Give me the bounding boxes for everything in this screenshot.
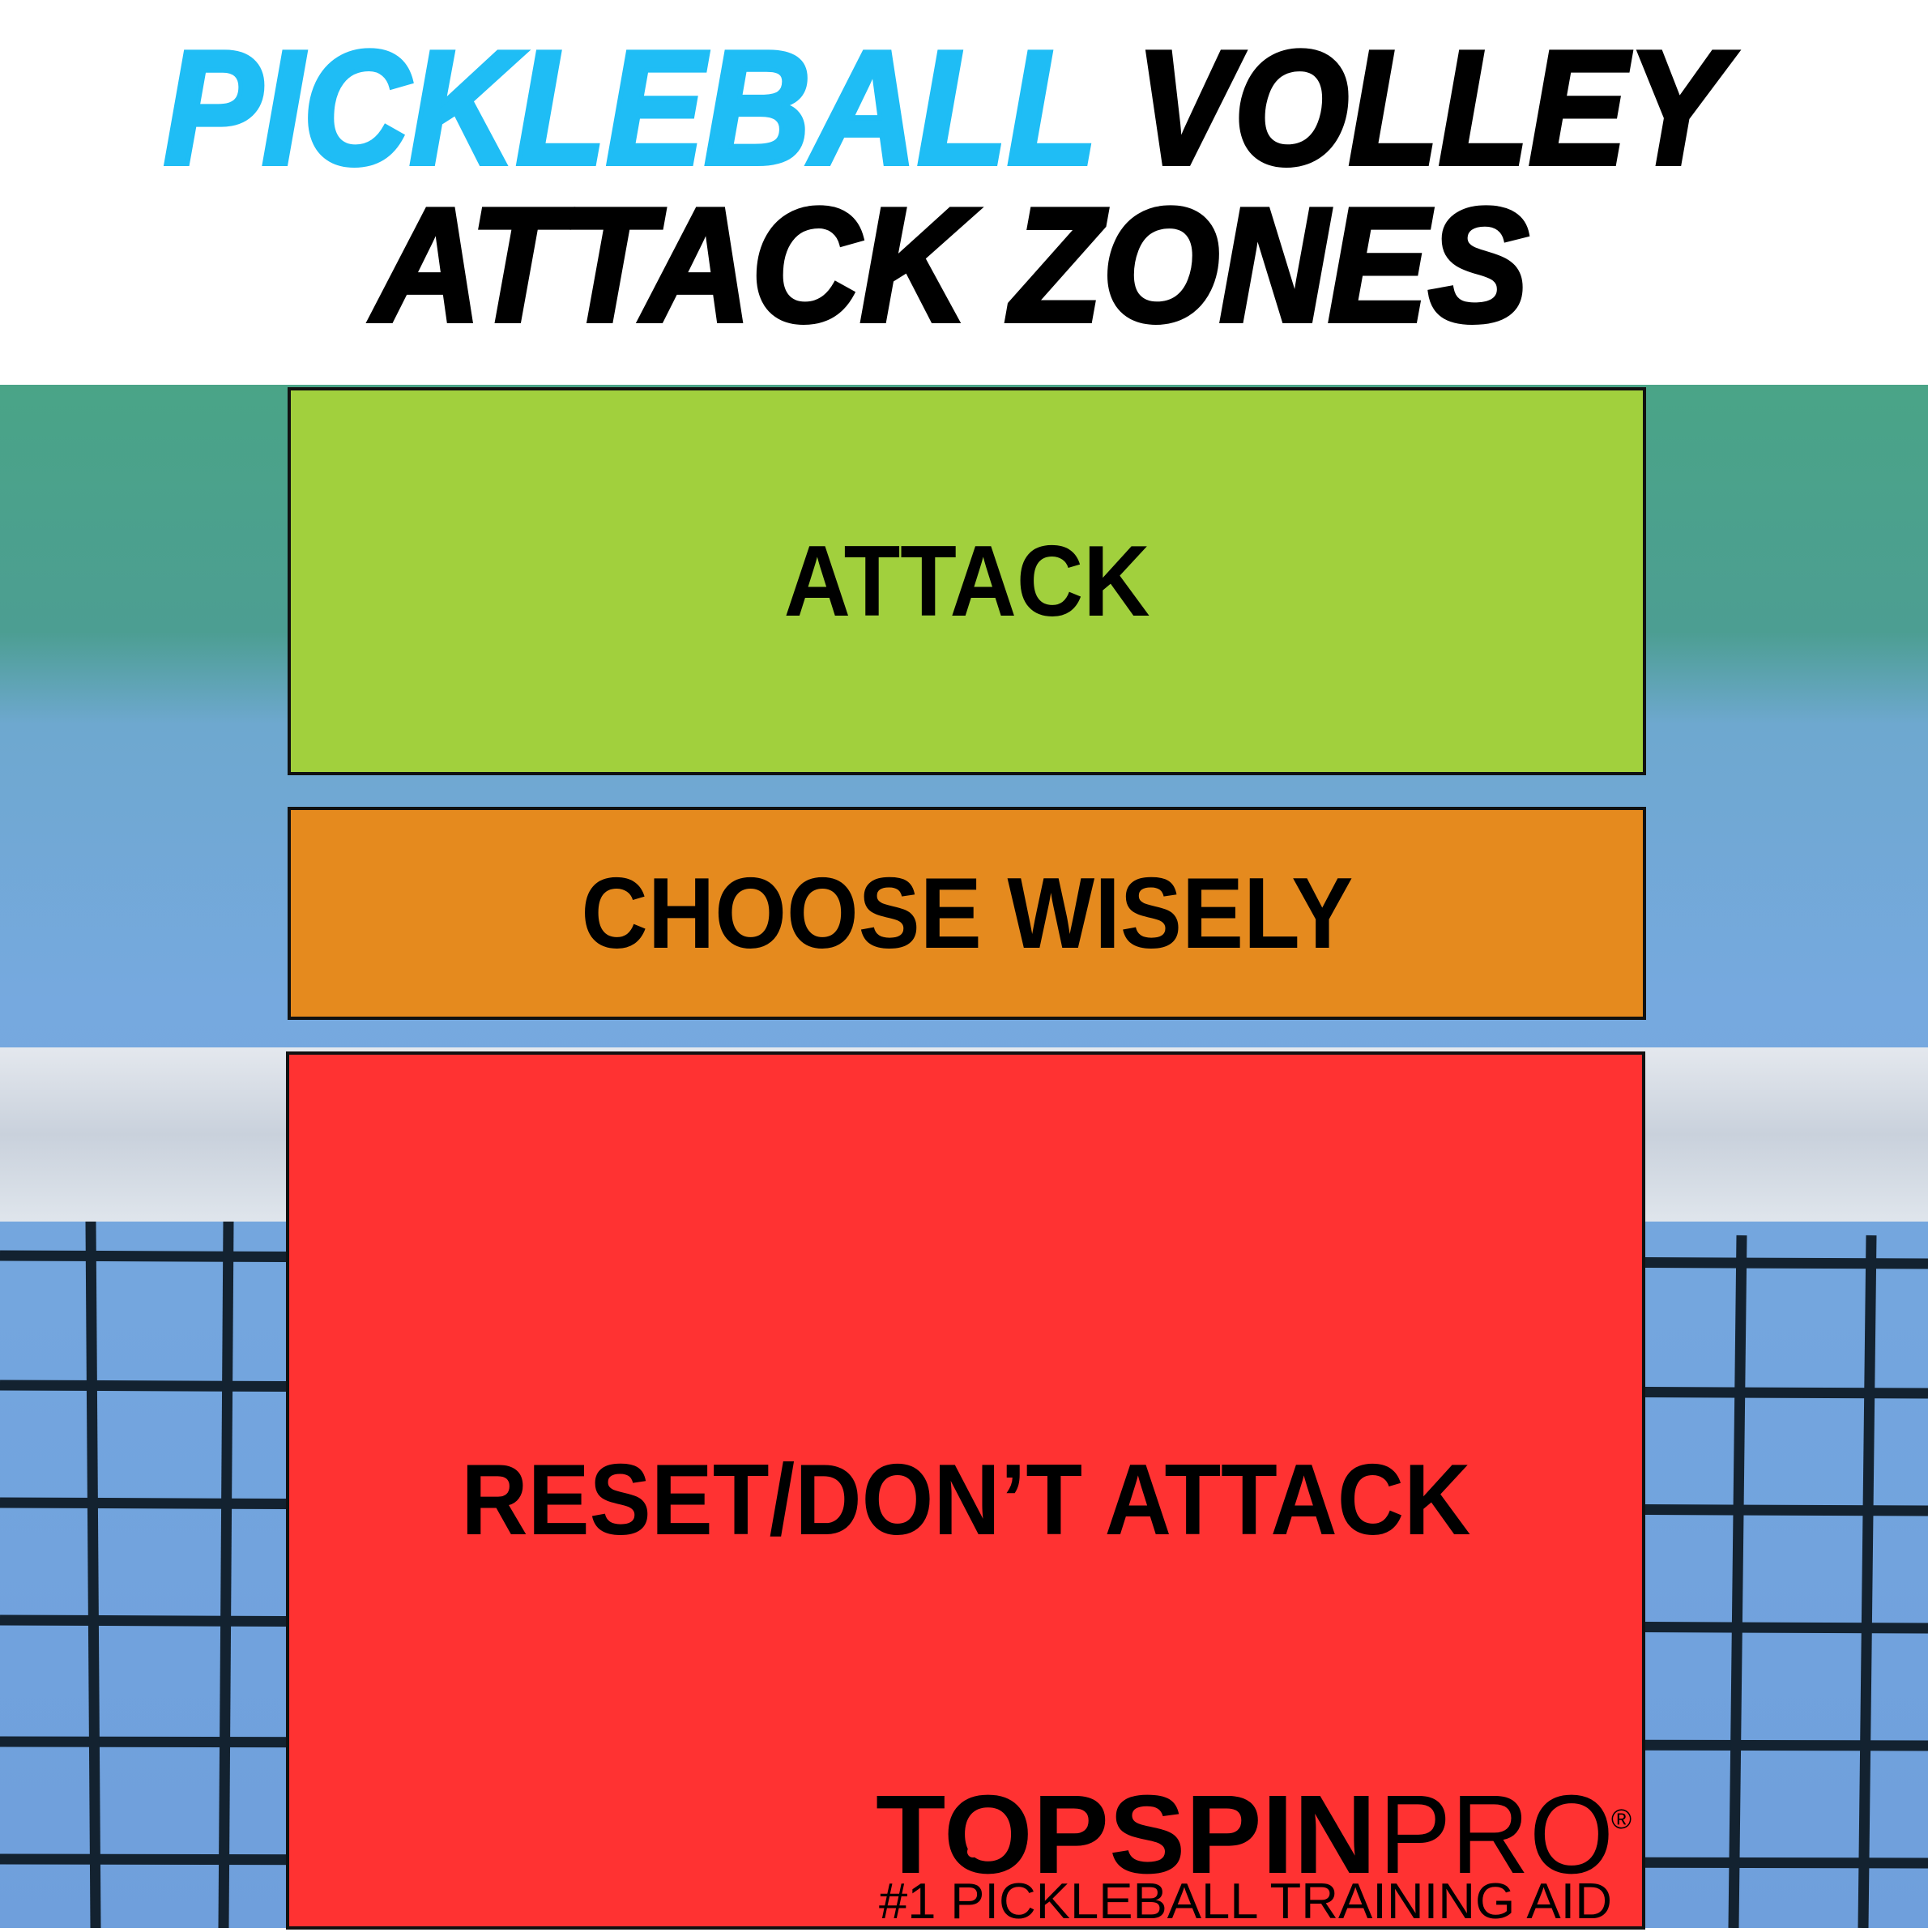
zone: attack — [288, 387, 1646, 775]
zone: choose wisely: CHOOSE WISELY — [581, 857, 1353, 969]
title: ATTACK ZONES — [369, 175, 1529, 356]
zone: reset — [286, 1051, 1645, 1930]
logo — [876, 1784, 1632, 1921]
zone label: reset: RESET/DON’T ATTACK — [461, 1444, 1470, 1556]
background: court and net — [0, 385, 1928, 1928]
title: PICKLEBALL VOLLEY — [164, 18, 1737, 198]
logo: ® — [1611, 1804, 1632, 1835]
zone: choose wisely — [288, 807, 1646, 1020]
zone: attack: ATTACK — [784, 525, 1150, 637]
title — [164, 18, 1742, 356]
